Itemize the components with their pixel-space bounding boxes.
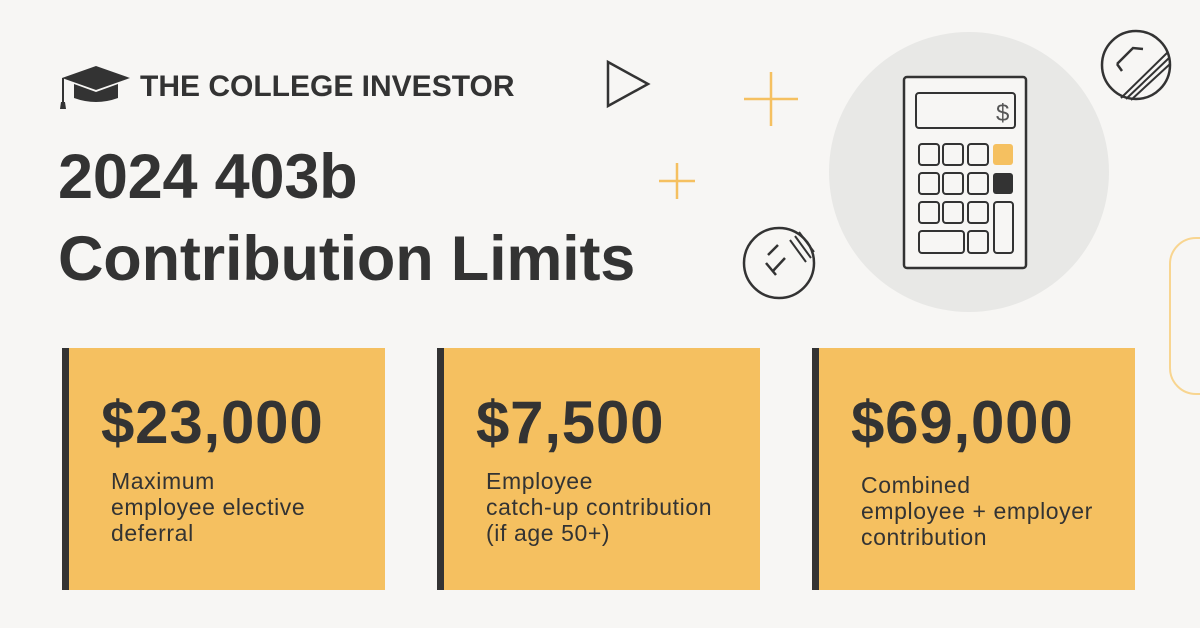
icon: graduation cap [60,66,130,109]
card 3: contribution [861,524,987,550]
icon: plus small [659,163,695,199]
card 1: Maximum [111,468,215,494]
calculator illustration: $ [996,100,1009,127]
logo [60,66,514,109]
card 3: employee + employer [861,498,1093,524]
title [58,142,635,294]
title: 2024 403b [58,142,357,212]
card 2 [437,348,760,590]
card 1: deferral [111,520,194,546]
icon: play triangle [608,62,648,106]
card 2: $7,500 [476,389,664,456]
card 2: (if age 50+) [486,520,610,546]
title: Contribution Limits [58,224,635,294]
icon: coin bottom [744,228,814,298]
card 3: Combined [861,472,971,498]
card 1 [62,348,385,590]
card 1: $23,000 [101,389,324,456]
icon: coin top [1102,31,1170,100]
card 2: catch-up contribution [486,494,712,520]
decorative rounded outline right [1170,238,1200,394]
card 2: Employee [486,468,593,494]
card 3 [812,348,1135,590]
card 1: employee elective [111,494,305,520]
icon: plus large [744,72,798,126]
brand name: THE COLLEGE INVESTOR [140,70,514,103]
card 3: $69,000 [851,389,1074,456]
calculator illustration [829,32,1109,312]
